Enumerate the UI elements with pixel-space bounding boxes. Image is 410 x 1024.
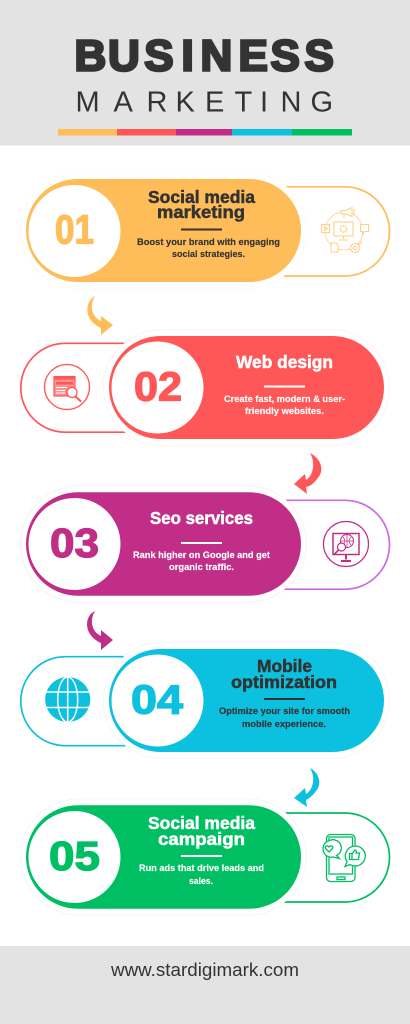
- number circle 4: [112, 654, 204, 746]
- description 5: Run ads that drive leads and: [139, 863, 264, 873]
- panel 3: seo services: [20, 486, 390, 602]
- divider 5: [181, 855, 222, 857]
- number circle 3: [28, 498, 120, 590]
- description 2: friendly websites.: [245, 406, 324, 416]
- heading 5: campaign: [158, 829, 245, 849]
- filled pill 5: [26, 805, 301, 909]
- outline tab 3: [240, 500, 390, 589]
- divider 4: [264, 698, 305, 700]
- footer band: [0, 946, 410, 1024]
- halo 1: [20, 172, 306, 288]
- arrow 1: [87, 296, 113, 335]
- arrow 4: [294, 768, 319, 807]
- icon: web search: [44, 364, 90, 410]
- icon: marketing cycle: [322, 208, 368, 252]
- panel 2: web design: [21, 330, 390, 446]
- number circle 4: 04: [131, 676, 183, 722]
- heading 1: Social media: [148, 187, 255, 207]
- description 4: Optimize your site for smooth: [219, 706, 350, 716]
- heading 2: Web design: [236, 352, 333, 372]
- description 4: mobile experience.: [242, 719, 326, 729]
- number circle 3: 03: [50, 520, 99, 566]
- arrow 2: [294, 453, 321, 494]
- icon: phone with reactions: [323, 834, 365, 882]
- heading 1: [148, 187, 255, 222]
- divider 2: [264, 386, 305, 388]
- description 2: [224, 394, 345, 416]
- description 2: Create fast, modern & user-: [224, 394, 345, 404]
- number circle 2: 02: [134, 364, 182, 410]
- title: Business: BUSINESS: [74, 32, 334, 80]
- description 3: [133, 550, 270, 572]
- description 3: organic traffic.: [169, 562, 234, 572]
- number circle 1: 01: [55, 206, 94, 252]
- description 1: [137, 237, 280, 259]
- icon: seo monitor: [324, 522, 368, 566]
- icon: globe: [45, 677, 90, 722]
- panel 1: social media marketing: [20, 172, 390, 288]
- description 5: [139, 863, 264, 886]
- description 1: Boost your brand with engaging: [137, 237, 280, 247]
- heading 4: [231, 656, 337, 692]
- subtitle: Marketing: MARKETING: [76, 86, 333, 118]
- outline tab 5: [240, 813, 390, 902]
- description 4: [219, 706, 350, 729]
- filled pill 4: [109, 649, 384, 752]
- colour bar: [58, 129, 352, 136]
- number circle 5: [28, 811, 120, 903]
- number circle 5: 05: [49, 833, 100, 879]
- divider 1: [181, 228, 222, 230]
- heading 5: [148, 813, 255, 849]
- heading 4: Mobile: [257, 656, 312, 676]
- filled pill 1: [26, 179, 301, 282]
- panel 4: mobile optimization: [21, 642, 390, 758]
- description 1: social strategies.: [172, 249, 245, 259]
- outline tab 1: [240, 187, 390, 276]
- halo 2: [104, 330, 390, 446]
- number circle 2: [112, 342, 204, 434]
- halo 3: [20, 486, 306, 602]
- heading 3: Seo services: [150, 508, 253, 528]
- heading 1: marketing: [157, 202, 245, 222]
- filled pill 2: [109, 336, 384, 439]
- halo 4: [104, 642, 390, 758]
- panel 5: social media campaign: [20, 799, 390, 915]
- divider 3: [181, 542, 222, 544]
- outline tab 2: [21, 343, 170, 432]
- description 5: sales.: [189, 876, 213, 886]
- heading 4: optimization: [231, 672, 337, 692]
- header band: [0, 0, 410, 146]
- halo 5: [20, 799, 306, 915]
- description 3: Rank higher on Google and get: [133, 550, 270, 560]
- number circle 1: [28, 185, 120, 277]
- filled pill 3: [26, 492, 301, 596]
- footer url: www.stardigimark.com: [110, 960, 299, 980]
- heading 5: Social media: [148, 813, 255, 833]
- arrow 3: [87, 611, 113, 650]
- outline tab 4: [21, 657, 170, 746]
